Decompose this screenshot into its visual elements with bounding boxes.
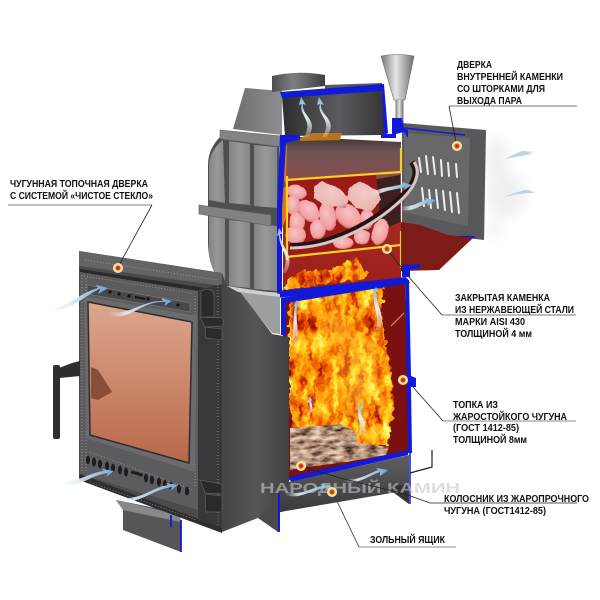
callout: firebox: (ГОСТ 1412-85) — [453, 423, 519, 434]
firebox section — [281, 278, 416, 482]
handle reflection on glass — [91, 367, 112, 400]
ash drawer — [116, 500, 181, 552]
lower vent slots — [86, 456, 189, 496]
callout: stone door: ВНУТРЕННЕЙ КАМЕНКИ — [457, 70, 563, 83]
stone door — [402, 123, 486, 240]
callout: grate: ЧУГУНА (ГОСТ1412-85) — [444, 506, 546, 517]
callout: closed stone chamber: ИЗ НЕРЖАВЕЮЩЕЙ СТАЛИ — [455, 303, 574, 316]
steam air arrows — [505, 151, 535, 159]
callout: stone door: ДВЕРКА — [457, 60, 492, 71]
stone chamber air arrows — [369, 182, 412, 197]
flange — [199, 205, 271, 226]
dark niche by pipe — [372, 175, 400, 232]
callout: stone door — [449, 60, 577, 151]
upper stove body — [199, 135, 279, 293]
door top blue edge — [405, 128, 465, 135]
glass frame highlight — [84, 296, 197, 472]
watermark: НАРОДНЫЙ КАМИН — [260, 479, 460, 497]
firebox up arrows — [277, 228, 290, 273]
hinges — [200, 289, 223, 512]
callout: ash box: ЗОЛЬНЫЙ ЯЩИК — [370, 533, 446, 546]
yellow stone frame — [286, 148, 401, 268]
steam pipe — [290, 162, 417, 248]
glass — [88, 302, 192, 463]
door side body — [222, 273, 289, 532]
callout: firebox: ТОЛЩИНОЙ 8мм — [453, 433, 527, 446]
chimney — [272, 73, 325, 92]
steam cloud — [484, 138, 526, 240]
flame glow — [326, 308, 376, 411]
door handle — [53, 361, 80, 439]
rear feet — [386, 484, 409, 504]
stone chamber — [281, 133, 417, 292]
rivet rows — [82, 260, 218, 525]
door lower air arrows — [62, 469, 114, 485]
air flow arrows — [50, 97, 540, 501]
callout: ash box — [327, 487, 456, 547]
top hood and chimney — [220, 73, 382, 147]
red inside frame — [288, 175, 382, 257]
burning logs — [290, 424, 389, 470]
callout: firebox door: ЧУГУННАЯ ТОПОЧНАЯ ДВЕРКА — [10, 179, 148, 190]
callout: stone door: СО ШТОРКАМИ ДЛЯ — [457, 84, 545, 95]
callout: firebox: ЖАРОСТОЙКОГО ЧУГУНА — [452, 410, 567, 423]
callout: firebox — [398, 375, 576, 446]
funnel — [381, 54, 414, 127]
callout: firebox door: С СИСТЕМОЙ «ЧИСТОЕ СТЕКЛО» — [10, 189, 153, 202]
upper vent — [87, 285, 190, 312]
blue firebox outline — [281, 278, 416, 482]
firebox door — [53, 251, 223, 533]
callout: firebox door — [8, 179, 153, 273]
stones — [285, 181, 391, 249]
flame mass — [289, 287, 394, 450]
flue up arrows — [299, 97, 312, 137]
callout: firebox: ТОПКА ИЗ — [453, 400, 498, 411]
steam slots — [419, 156, 459, 213]
stray bracket line — [410, 450, 432, 473]
ash pan section — [258, 453, 410, 532]
door wall and blue section outlines — [277, 84, 420, 298]
callout: closed stone chamber: ТОЛЩИНОЙ 4 мм — [455, 327, 532, 340]
flames beside chamber wall — [281, 144, 287, 232]
small sparks — [391, 313, 404, 326]
upper hood cavity — [282, 90, 386, 136]
callout: stone door: ВЫХОДА ПАРА — [457, 96, 522, 107]
callout: closed stone chamber: ЗАКРЫТАЯ КАМЕНКА — [455, 293, 550, 304]
flames under frame — [283, 258, 370, 290]
callout: closed stone chamber — [382, 244, 576, 340]
flames at chamber ceiling — [300, 133, 342, 141]
red lower part of the door chamber — [401, 222, 473, 271]
ash air arrows — [285, 484, 332, 496]
door upper air arrows — [50, 285, 108, 310]
callout: grate — [296, 461, 589, 517]
callout: closed stone chamber: МАРКИ AISI 430 — [455, 317, 525, 328]
